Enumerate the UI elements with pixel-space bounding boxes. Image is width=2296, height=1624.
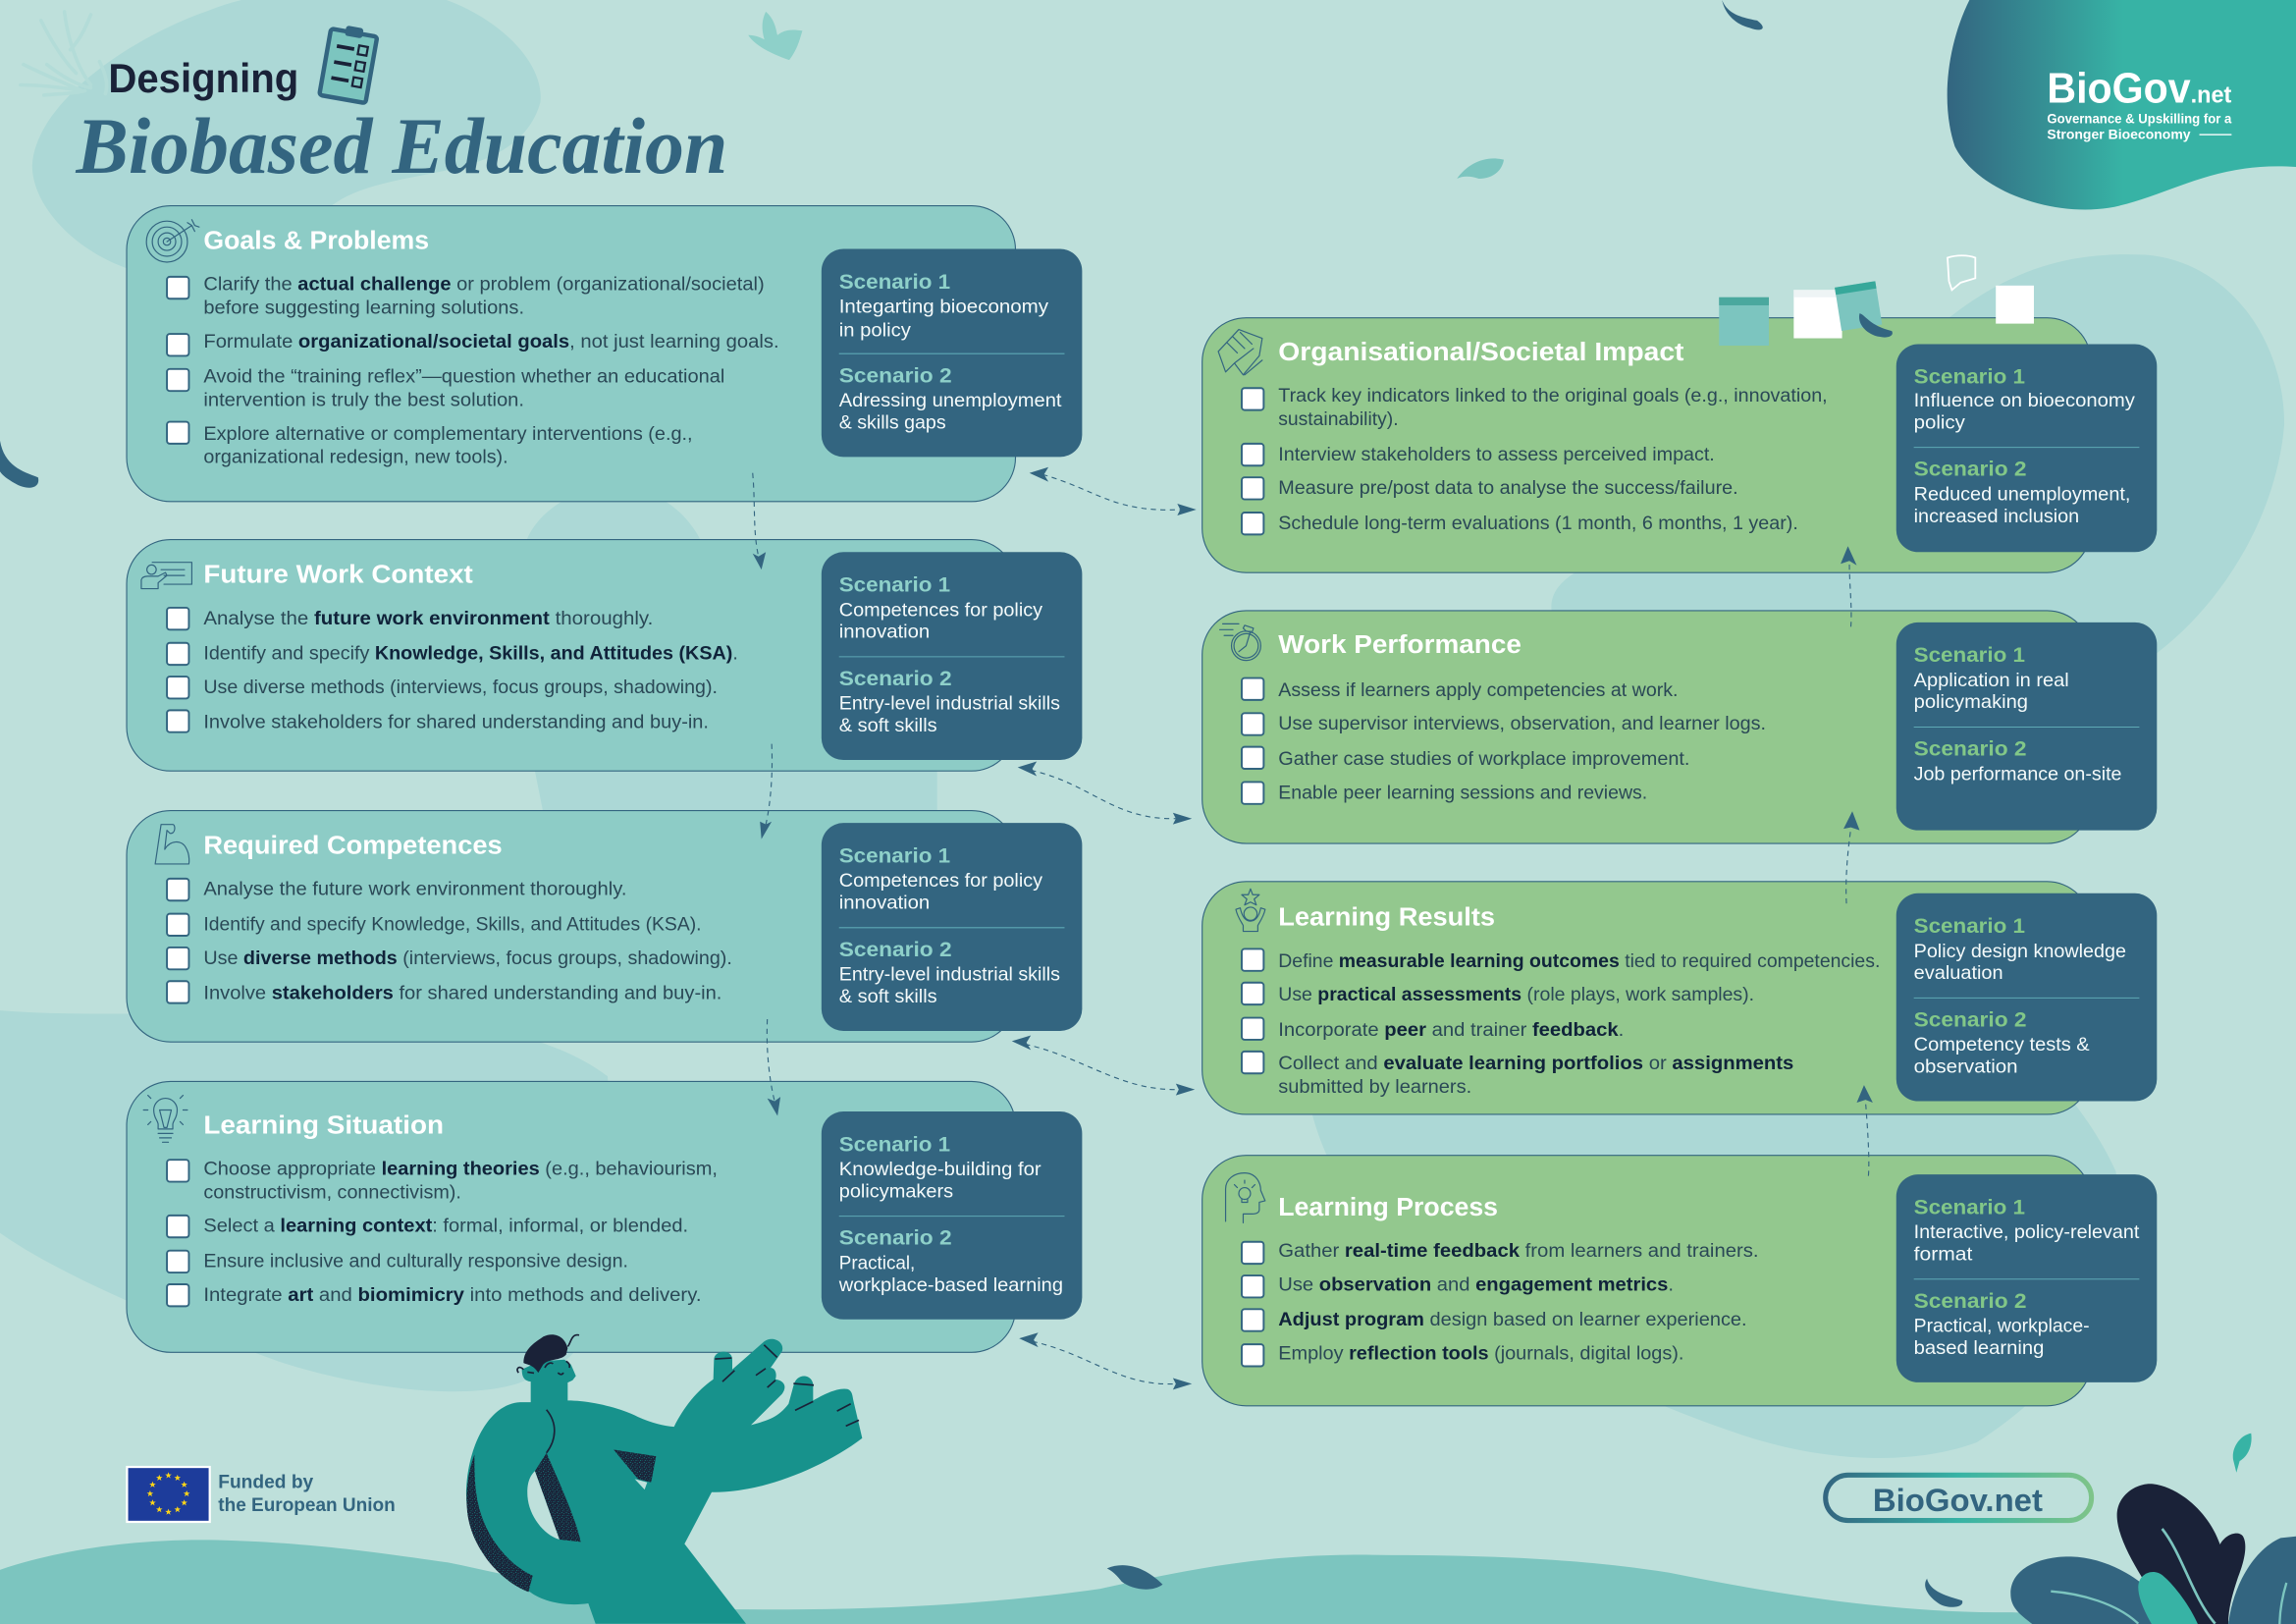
scenario box: [1896, 623, 2157, 831]
scenario box: [822, 823, 1082, 1031]
checklist: Schedule long-term evaluations (1 month, 6 months, 1 year).: [1278, 514, 1798, 534]
panel: Learning Process: [1202, 1156, 2157, 1406]
checklist: [167, 879, 732, 1004]
scenario box: Entry-level industrial skills: [839, 964, 1060, 986]
scenario box: based learning: [1914, 1337, 2044, 1359]
scenario box: Scenario 1: [1914, 1194, 2025, 1218]
panel: Goals & Problems: [127, 206, 1082, 502]
scenario box: policy: [1914, 411, 1965, 433]
scenario box: Application in real: [1914, 670, 2069, 691]
checklist: Clarify the actual challenge or problem (organizational/societal): [203, 275, 765, 296]
panel: Organisational/Societal Impact: [1202, 318, 2157, 572]
scenario box: policymaking: [1914, 691, 2028, 713]
arrow: results to performance: [1843, 811, 1859, 903]
website pill: BioGov.net: [1873, 1482, 2043, 1518]
checklist: Analyse the future work environment thoroughly.: [203, 609, 653, 629]
logo: BioGov: [2047, 65, 2191, 112]
panel: Work Performance: [1202, 611, 2157, 843]
scenario box: Scenario 2: [1914, 1288, 2027, 1313]
scenario box: innovation: [839, 622, 930, 643]
checklist: [167, 275, 779, 468]
scenario box: Scenario 2: [1914, 736, 2027, 761]
arrow: goals to future work: [753, 473, 766, 569]
icon: clipboard: [319, 23, 378, 103]
checklist: submitted by learners.: [1278, 1077, 1471, 1098]
scenario box: Interactive, policy-relevant: [1914, 1221, 2140, 1243]
checklist: Select a learning context : formal, informal, or blended.: [203, 1217, 688, 1237]
checklist: Choose appropriate learning theories (e.g., behaviourism,: [203, 1160, 718, 1180]
checklist: Ensure inclusive and culturally responsive design.: [203, 1252, 628, 1272]
heading: Goals & Problems: [203, 226, 429, 255]
scenario box: Scenario 2: [1914, 1006, 2027, 1031]
arrow: competences to situation: [767, 1019, 780, 1115]
scenario box: [1896, 893, 2157, 1102]
arrow: competences and results: [1012, 1035, 1195, 1096]
title: Biobased Education: Biobased Education: [76, 101, 727, 190]
icon: presenter: [141, 563, 191, 589]
checklist: Integrate art and biomimicry into methods and delivery.: [203, 1285, 702, 1306]
scenario box: Scenario 2: [1914, 457, 2027, 481]
panel: Learning Situation: [127, 1081, 1082, 1352]
panel: Learning Results: [1202, 882, 2157, 1114]
checklist: Collect and evaluate learning portfolios or assignments: [1278, 1054, 1793, 1074]
heading: Learning Process: [1278, 1192, 1498, 1221]
icon: handshake: [1218, 330, 1262, 375]
scenario box: Practical,: [839, 1252, 915, 1273]
scenario box: Scenario 2: [839, 666, 952, 690]
funding text: the European Union: [218, 1494, 396, 1516]
checklist: Explore alternative or complementary interventions (e.g.,: [203, 424, 693, 445]
checklist: Use practical assessments (role plays, work samples).: [1278, 985, 1754, 1005]
scenario box: Integarting bioeconomy: [839, 297, 1048, 318]
arrow: future work to competences: [760, 744, 773, 839]
scenario box: Reduced unemployment,: [1914, 483, 2130, 505]
checklist: Track key indicators linked to the original goals (e.g., innovation,: [1278, 386, 1828, 406]
scenario box: Scenario 2: [839, 1225, 952, 1250]
scenario box: Scenario 1: [839, 572, 950, 597]
checklist: Involve stakeholders for shared understanding and buy-in.: [203, 713, 709, 733]
scenario box: evaluation: [1914, 962, 2003, 984]
checklist: Use observation and engagement metrics .: [1278, 1274, 1674, 1295]
bottom wave: [0, 1540, 2296, 1624]
checklist: Incorporate peer and trainer feedback .: [1278, 1020, 1624, 1041]
arrow: situation and process: [1019, 1332, 1192, 1389]
leaf: bottom right dark: [1925, 1579, 1962, 1607]
checklist: [167, 608, 738, 733]
leaf: top dark: [1722, 0, 1763, 29]
checklist: Avoid the “training reflex”—question whether an educational: [203, 367, 724, 388]
checklist: Analyse the future work environment thoroughly.: [203, 880, 626, 900]
checklist: Use diverse methods (interviews, focus groups, shadowing).: [203, 948, 732, 969]
funding text: Funded by: [218, 1471, 313, 1492]
heading: Future Work Context: [203, 560, 473, 589]
checklist: Formulate organizational/societal goals , not just learning goals.: [203, 332, 779, 352]
checklist: [1242, 948, 1880, 1098]
checklist: intervention is truly the best solution.: [203, 391, 524, 411]
logo: Governance & Upskilling for a: [2047, 111, 2231, 127]
icon: head with bulb: [1226, 1173, 1265, 1222]
checklist: sustainability).: [1278, 409, 1399, 430]
heading: Learning Results: [1278, 902, 1495, 932]
icon: light bulb: [143, 1096, 187, 1142]
heading: Learning Situation: [203, 1110, 444, 1139]
sticky notes: [1719, 255, 2034, 346]
checklist: Interview stakeholders to assess perceived impact.: [1278, 445, 1715, 465]
checklist: Assess if learners apply competencies at work.: [1278, 680, 1678, 701]
scenario box: [822, 552, 1082, 760]
checklist: [1242, 678, 1766, 804]
scenario box: Scenario 2: [839, 937, 952, 961]
checklist: Adjust program design based on learner experience.: [1278, 1310, 1747, 1330]
leaf: top teal: [748, 12, 802, 60]
checklist: organizational redesign, new tools).: [203, 448, 508, 468]
checklist: Use diverse methods (interviews, focus groups, shadowing).: [203, 677, 718, 698]
scenario box: Knowledge-building for: [839, 1159, 1041, 1180]
logo: [2047, 65, 2231, 143]
logo: .net: [2191, 81, 2231, 108]
scenario box: Competency tests &: [1914, 1034, 2090, 1056]
icon: person with star: [1236, 889, 1265, 932]
scenario box: & soft skills: [839, 715, 937, 736]
scenario box: Scenario 1: [1914, 364, 2025, 389]
scenario box: innovation: [839, 893, 930, 914]
checklist: Gather real-time feedback from learners and trainers.: [1278, 1241, 1759, 1262]
scenario box: & soft skills: [839, 986, 937, 1007]
scenario box: [1896, 344, 2157, 552]
heading: Organisational/Societal Impact: [1278, 337, 1684, 366]
checklist: [1242, 1241, 1759, 1367]
scenario box: Job performance on-site: [1914, 763, 2121, 785]
figure: person with outstretched arm: [466, 1334, 862, 1624]
heading: Designing: Designing: [108, 55, 298, 101]
scenario box: Practical, workplace-: [1914, 1316, 2090, 1337]
scenario box: [822, 1111, 1082, 1320]
checklist: [167, 1160, 718, 1306]
logo: Stronger Bioeconomy: [2047, 128, 2191, 143]
checklist: Measure pre/post data to analyse the success/failure.: [1278, 478, 1738, 499]
icon: flexed arm: [155, 825, 189, 864]
scenario box: Influence on bioeconomy: [1914, 390, 2135, 411]
checklist: before suggesting learning solutions.: [203, 298, 524, 319]
checklist: Involve stakeholders for shared understanding and buy-in.: [203, 984, 721, 1004]
arrow: future work and performance: [1018, 762, 1192, 825]
scenario box: [822, 249, 1082, 457]
website pill: [1826, 1475, 2092, 1521]
scenario box: Scenario 1: [839, 842, 950, 867]
scenario box: increased inclusion: [1914, 506, 2079, 527]
logo blob: [1948, 0, 2296, 209]
arrow: performance to impact: [1841, 546, 1856, 626]
coral decoration: [21, 12, 107, 95]
leaf: bottom dark: [1107, 1565, 1162, 1590]
EU flag: [126, 1466, 211, 1523]
icon: target: [146, 220, 199, 262]
checklist: Identify and specify Knowledge, Skills, and Attitudes (KSA).: [203, 915, 702, 936]
panel: Future Work Context: [127, 540, 1082, 771]
scenario box: Scenario 1: [1914, 642, 2025, 667]
leaf: mid teal: [1457, 158, 1504, 179]
arrow: process to results: [1856, 1085, 1873, 1176]
plant: [2010, 1434, 2296, 1624]
checklist: Gather case studies of workplace improvement.: [1278, 749, 1689, 770]
scenario box: Scenario 1: [839, 1131, 950, 1156]
scenario box: format: [1914, 1244, 1973, 1266]
scenario box: Adressing unemployment: [839, 390, 1062, 411]
heading: Work Performance: [1278, 629, 1522, 659]
icon: stopwatch: [1220, 623, 1260, 661]
checklist: Enable peer learning sessions and reviews.: [1278, 783, 1647, 803]
checklist: [1242, 386, 1828, 534]
arrow: goals and impact: [1030, 467, 1197, 515]
leaf: left dark: [0, 441, 38, 488]
scenario box: [1896, 1174, 2157, 1382]
scenario box: observation: [1914, 1056, 2018, 1078]
scenario box: in policy: [839, 319, 911, 341]
funding text: [218, 1471, 396, 1516]
heading: Required Competences: [203, 831, 503, 860]
checklist: Employ reflection tools (journals, digital logs).: [1278, 1343, 1683, 1364]
checklist: Define measurable learning outcomes tied to required competencies.: [1278, 951, 1880, 972]
checklist: Identify and specify Knowledge, Skills, and Attitudes (KSA) .: [203, 644, 738, 665]
scenario box: Competences for policy: [839, 870, 1042, 892]
scenario box: Policy design knowledge: [1914, 941, 2126, 962]
scenario box: policymakers: [839, 1180, 953, 1202]
checklist: constructivism, connectivism).: [203, 1182, 461, 1203]
scenario box: Entry-level industrial skills: [839, 693, 1060, 715]
scenario box: workplace-based learning: [838, 1274, 1063, 1296]
scenario box: Scenario 2: [839, 362, 952, 387]
scenario box: Competences for policy: [839, 599, 1042, 621]
scenario box: Scenario 1: [839, 269, 950, 294]
scenario box: & skills gaps: [839, 411, 946, 433]
checklist: Use supervisor interviews, observation, and learner logs.: [1278, 714, 1766, 734]
scenario box: Scenario 1: [1914, 913, 2025, 938]
panel: Required Competences: [127, 811, 1082, 1042]
